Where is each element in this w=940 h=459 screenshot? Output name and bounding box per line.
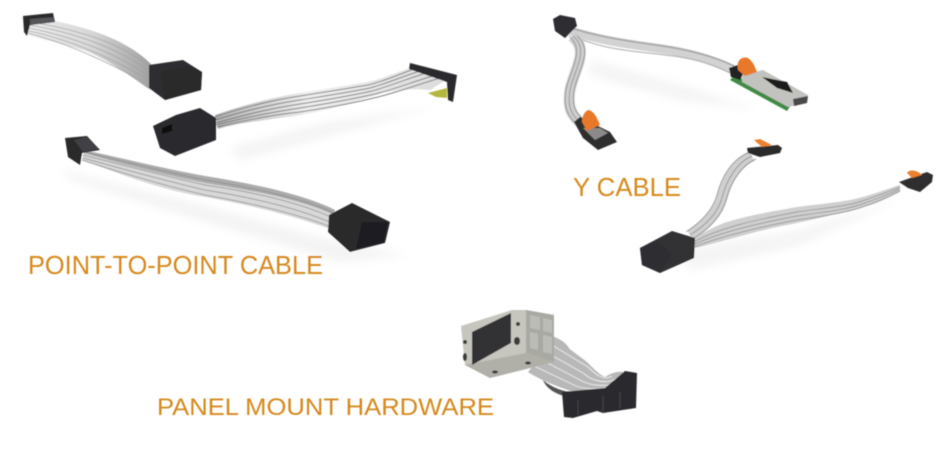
housing screw holes	[463, 322, 531, 374]
label: panel mount hardware: PANEL MOUNT HARDWARE	[157, 394, 494, 421]
grille: housing front mesh	[472, 313, 511, 365]
group: point-to-point cables	[23, 13, 457, 280]
connector: top Y lower plug	[574, 110, 617, 150]
cable: upper left ribbon	[28, 20, 152, 89]
group: Y cables	[553, 15, 933, 273]
connector: panel mount black headers	[562, 371, 637, 418]
connector: lower left small	[65, 136, 100, 165]
housing side panel detail	[530, 315, 552, 354]
panel mount metal housing	[461, 310, 554, 378]
icon: orange pull tab	[907, 171, 922, 178]
connector: top Y circuit module	[729, 58, 808, 111]
cable: panel mount ribbon	[528, 338, 625, 393]
cable: upper right ribbon	[215, 68, 446, 129]
bracket: panel mount under curve	[543, 380, 575, 396]
label: point-to-point cable: POINT-TO-POINT CABLE	[28, 250, 323, 280]
connector: lower right large	[328, 203, 390, 252]
label: Y cable: Y CABLE	[573, 174, 681, 202]
connector: upper right header	[409, 63, 457, 102]
icon: orange pull tab	[582, 110, 600, 131]
group: panel mount hardware	[157, 310, 637, 421]
cable: lower ribbon	[82, 150, 335, 229]
icon: orange pull tab	[754, 139, 772, 147]
cable: bottom Y upper branch	[686, 153, 756, 238]
connector: center large	[153, 108, 216, 156]
soft shadows under point-to-point cables	[60, 106, 440, 262]
cable: panel mount upper loop	[550, 336, 571, 368]
connector: bottom Y upper plug	[747, 139, 782, 157]
connector: upper left small	[23, 13, 55, 36]
icon: orange pull tab	[738, 58, 757, 76]
cable: top Y upper branch	[568, 27, 736, 73]
connector: top Y header	[553, 15, 577, 38]
cable: top Y lower branch	[565, 36, 586, 126]
soft shadows under Y cables	[590, 60, 910, 270]
cable: bottom Y right branch	[690, 185, 900, 248]
connector: bottom Y large	[640, 231, 695, 273]
connector: bottom Y right plug	[899, 171, 933, 192]
connector: upper left large	[149, 60, 202, 100]
connector: green circuit board	[428, 88, 447, 98]
